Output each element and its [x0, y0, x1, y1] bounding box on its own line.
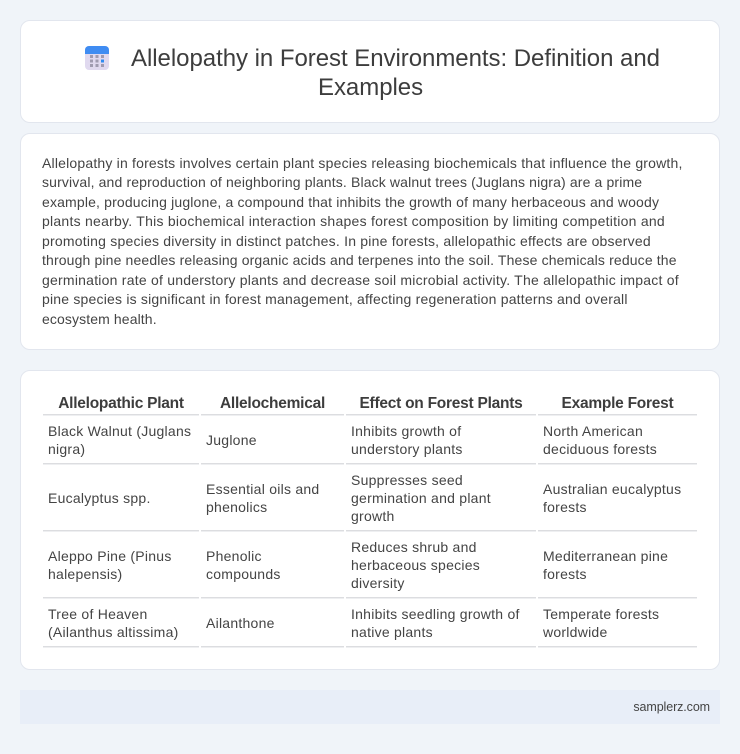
row: black walnut: understory plants [351, 441, 463, 457]
title: Examples [318, 74, 423, 101]
panel: title card [20, 20, 720, 123]
row: tree of heaven: Temperate forests [543, 606, 659, 622]
row: aleppo pine: compounds [206, 566, 281, 582]
row: eucalyptus: phenolics [206, 499, 267, 515]
row: eucalyptus: Essential oils and [206, 481, 319, 497]
row: eucalyptus: growth [351, 508, 395, 524]
table header: Effect on Forest Plants [359, 395, 523, 412]
row: tree of heaven [48, 606, 659, 640]
row: aleppo pine: diversity [351, 575, 405, 591]
row: tree of heaven: Tree of Heaven [48, 606, 147, 622]
footer bar [20, 690, 720, 724]
row: aleppo pine: Reduces shrub and [351, 539, 477, 555]
text block: description [42, 154, 683, 327]
row: eucalyptus [48, 472, 681, 524]
row: aleppo pine: Mediterranean pine [543, 548, 668, 564]
row: aleppo pine: herbaceous species [351, 557, 480, 573]
text block: description: promoting species diversity in distinct patches. In pine forests, allelopathic effects are observed [42, 232, 651, 248]
panel: table card [20, 370, 720, 670]
row: aleppo pine: forests [543, 566, 587, 582]
table header: Example Forest [562, 395, 673, 412]
row: eucalyptus: Suppresses seed [351, 472, 463, 488]
text block: description: germination rate of understory plants and decrease soil microbial activity. The allelopathic impact of [42, 272, 679, 288]
text block: description: Allelopathy in forests involves certain plant species releasing biochemicals that influence the growth, [42, 154, 683, 170]
text block: description: pine species is significant in forest management, affecting regeneration patterns and overall [42, 291, 628, 307]
footer text: samplerz.com [633, 700, 710, 714]
row: tree of heaven: worldwide [543, 624, 608, 640]
icon: calendar [85, 46, 109, 70]
table header: Allelopathic Plant [58, 395, 184, 412]
table header [58, 395, 674, 412]
panel: description card [20, 133, 720, 350]
text block: description: survival, and reproduction of neighboring plants. Black walnut trees (Juglans nigra) are a prime [42, 174, 642, 190]
row: aleppo pine [48, 539, 668, 591]
text block: description: ecosystem health. [42, 310, 157, 326]
table [43, 395, 697, 648]
row: black walnut: Juglone [206, 432, 257, 448]
text block: description: plants nearby. This biochemical interaction shapes forest composition by limiting competition and [42, 213, 665, 229]
row: eucalyptus: Eucalyptus spp. [48, 490, 151, 506]
row: aleppo pine: Aleppo Pine (Pinus [48, 548, 172, 564]
row: black walnut: nigra) [48, 441, 85, 457]
row: tree of heaven: native plants [351, 624, 433, 640]
row: tree of heaven: Ailanthone [206, 615, 275, 631]
row: aleppo pine: halepensis) [48, 566, 122, 582]
table header: Allelochemical [220, 395, 325, 412]
text block: description: through pine needles releasing organic acids and terpenes into the soil. These chemicals reduce the [42, 252, 677, 268]
row: eucalyptus: germination and plant [351, 490, 491, 506]
row: aleppo pine: Phenolic [206, 548, 262, 564]
row: black walnut [48, 423, 657, 457]
row: black walnut: Black Walnut (Juglans [48, 423, 191, 439]
row: eucalyptus: forests [543, 499, 587, 515]
row: tree of heaven: (Ailanthus altissima) [48, 624, 179, 640]
title: Allelopathy in Forest Environments: Definition and [131, 45, 660, 72]
row: eucalyptus: Australian eucalyptus [543, 481, 681, 497]
row: black walnut: North American [543, 423, 643, 439]
row: black walnut: deciduous forests [543, 441, 657, 457]
row: tree of heaven: Inhibits seedling growth of [351, 606, 520, 622]
title [131, 45, 660, 101]
text block: description: example, producing juglone, a compound that inhibits the growth of many herbaceous and woody [42, 194, 659, 210]
row: black walnut: Inhibits growth of [351, 423, 461, 439]
